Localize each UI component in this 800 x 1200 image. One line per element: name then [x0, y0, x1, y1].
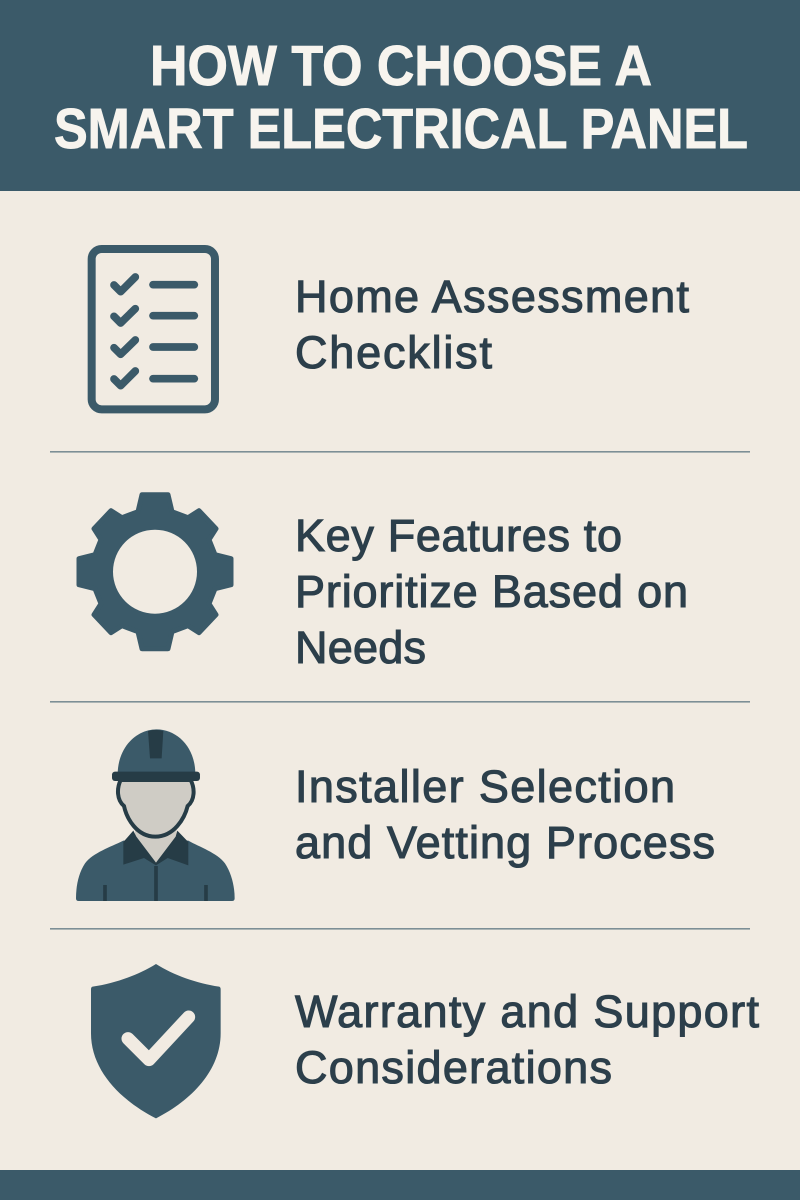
item text: warranty and support: Considerations: [295, 1042, 612, 1093]
body: [76, 841, 235, 901]
item text: warranty and support: Warranty and Support: [295, 986, 759, 1037]
footer band: [0, 1170, 800, 1200]
item text: home assessment checklist: [295, 271, 689, 378]
item text: warranty and support: [295, 986, 759, 1093]
zipper and seams: [105, 866, 206, 901]
item text: key features: [295, 510, 688, 673]
item text: installer selection: and Vetting Process: [295, 817, 715, 868]
hard hat: [118, 729, 195, 773]
icon: gear: [79, 495, 231, 649]
item text: key features: Prioritize Based on: [295, 566, 688, 617]
icon: installer with hard hat: [76, 729, 235, 901]
collar: [123, 831, 188, 865]
title: [54, 34, 748, 161]
head: [118, 780, 194, 837]
item text: home assessment checklist: Checklist: [295, 327, 492, 378]
item text: key features: Needs: [295, 622, 426, 673]
neck: [135, 828, 177, 864]
icon: shield with check: [91, 964, 221, 1118]
header band: [0, 0, 800, 191]
item text: installer selection: [295, 761, 715, 868]
icon: checklist: [92, 249, 215, 409]
item text: key features: Key Features to: [295, 510, 622, 561]
item text: home assessment checklist: Home Assessment: [295, 271, 689, 322]
item text: installer selection: Installer Selection: [295, 761, 675, 812]
title: HOW TO CHOOSE A: [150, 34, 652, 98]
